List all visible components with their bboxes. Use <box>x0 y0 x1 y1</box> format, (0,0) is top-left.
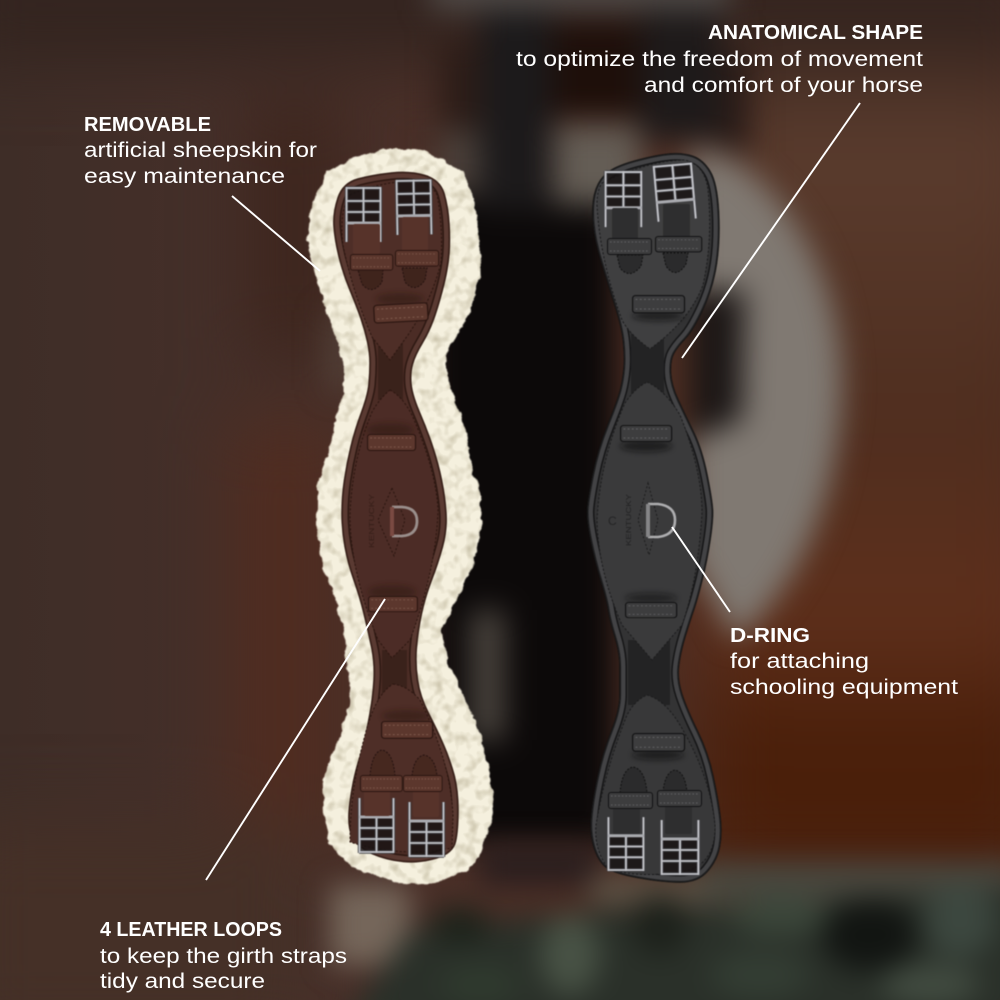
top buckles <box>346 179 432 242</box>
elastic necks <box>628 325 670 705</box>
top straps, tabs and keepers <box>608 204 702 274</box>
icon: logo diamond <box>638 483 658 555</box>
leather edge piping <box>587 154 721 882</box>
callout: D-ring <box>672 527 958 699</box>
bottom straps and keepers <box>608 790 702 834</box>
callout: anatomical shape: and comfort of your horse <box>644 73 923 97</box>
lower panel <box>350 684 453 852</box>
elastic necks <box>378 340 407 695</box>
bottom buckles <box>359 798 444 857</box>
bottom tabs <box>620 767 687 793</box>
icon: logo C: C <box>608 514 617 528</box>
callout: D-ring: for attaching <box>730 649 869 673</box>
icon: logo diamond <box>378 488 405 556</box>
callout: removable: REMOVABLE <box>84 114 211 136</box>
dark centre, saddle arc and straps <box>325 0 842 845</box>
leather body <box>334 172 458 862</box>
callout: anatomical shape <box>516 22 923 358</box>
centre panel <box>350 390 438 658</box>
ground and foliage <box>330 845 1000 1000</box>
callout: D-ring: schooling equipment <box>730 675 958 699</box>
brand mark: KENTUCKY <box>624 494 633 546</box>
bottom buckles <box>608 817 699 875</box>
callout: D-ring: D-RING <box>730 625 810 647</box>
callout: 4 leather loops: to keep the girth straps <box>100 944 347 968</box>
leather loops <box>620 296 685 760</box>
callout: 4 leather loops: 4 LEATHER LOOPS <box>100 919 282 941</box>
icon: D-ring <box>648 504 675 537</box>
top straps, tabs and keepers <box>350 217 439 290</box>
callout: anatomical shape: to optimize the freedom of movement <box>516 47 923 71</box>
bottom tabs <box>370 750 437 776</box>
leather edge piping <box>334 172 458 862</box>
bottom straps and keepers <box>360 776 442 817</box>
callout: 4 leather loops <box>100 599 385 993</box>
callout: removable: easy maintenance <box>84 164 285 188</box>
sheepskin lining <box>308 150 493 885</box>
callout: removable: artificial sheepskin for <box>84 138 317 162</box>
centre panel <box>597 382 702 660</box>
callout: removable <box>84 114 320 271</box>
leather loops <box>366 293 433 738</box>
icon: D-ring <box>392 507 417 536</box>
upper panel <box>597 160 710 349</box>
leather body <box>587 154 721 882</box>
callout: anatomical shape: ANATOMICAL SHAPE <box>708 22 923 44</box>
upper panel <box>342 181 442 360</box>
top buckles <box>605 163 696 227</box>
lower panel <box>596 695 715 875</box>
girth: black anatomical <box>587 154 721 882</box>
brand mark: KENTUCKY <box>367 494 376 548</box>
girth: brown with removable sheepskin <box>308 150 493 885</box>
callout: 4 leather loops: tidy and secure <box>100 969 265 993</box>
